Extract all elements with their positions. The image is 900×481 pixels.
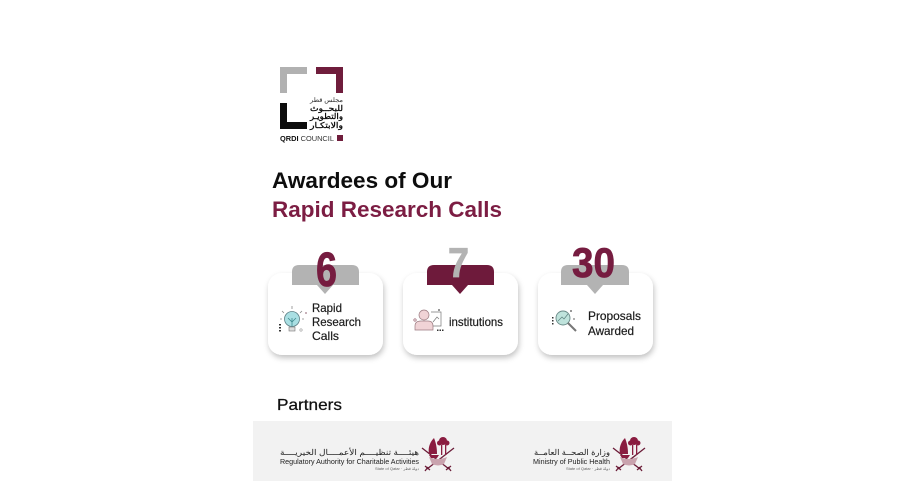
icon: Qatar emblem [422, 437, 454, 471]
tab [561, 265, 629, 294]
label: Rapid [312, 301, 342, 315]
English name: Ministry of Public Health [533, 457, 610, 466]
title: Awardees of Our [272, 168, 452, 193]
logo: Arabic name: للبحــوث [310, 104, 343, 114]
icon: magnifier with chart [552, 310, 576, 331]
English name: Regulatory Authority for Charitable Activities [280, 457, 419, 466]
label: Proposals [588, 309, 641, 323]
title [272, 168, 502, 222]
tab [292, 265, 359, 294]
panel: institutions [403, 239, 518, 355]
card [403, 273, 518, 355]
State of Qatar line: State of Qatar · دولة قطر [375, 466, 419, 471]
heading: partners: Partners [277, 397, 342, 414]
title: Rapid Research Calls [272, 197, 502, 222]
logo: square mark [337, 135, 343, 141]
panel: rapid research calls [268, 244, 383, 355]
icon: Qatar emblem [613, 437, 645, 471]
logo: maroon corner [316, 67, 343, 93]
label: Awarded [588, 324, 634, 338]
icon: light bulb [279, 306, 307, 332]
panel: proposals awarded [538, 239, 653, 355]
Arabic name: هيئــــة تنظيــــم الأعمــــال الخيريــــة [280, 447, 419, 457]
State of Qatar line: State of Qatar · دولة قطر [566, 466, 610, 471]
number: 7 [448, 239, 469, 286]
card [538, 273, 653, 355]
label: Calls [312, 329, 339, 343]
logo: Arabic name: والتطويـر [309, 112, 343, 122]
logo: Arabic name [309, 96, 344, 131]
partner: Regulatory Authority for Charitable Activities [280, 437, 454, 471]
logo: black corner [280, 103, 307, 129]
logo: QRDI Council [280, 67, 344, 143]
Arabic name: وزارة الصحــة العامــة [534, 448, 610, 457]
panel: partners band [253, 421, 672, 481]
logo: QRDI COUNCIL wordmark: QRDI COUNCIL [280, 134, 334, 143]
number: 6 [316, 244, 337, 297]
card [268, 273, 383, 355]
logo: Arabic name: والابتكـار [309, 121, 343, 131]
label [588, 309, 641, 338]
logo: Arabic name: مجلس قطر [309, 96, 344, 104]
tab [427, 265, 494, 294]
label: Research [312, 315, 361, 329]
label [312, 301, 361, 343]
icon: presenter with chart [414, 309, 444, 331]
number: 30 [572, 239, 615, 286]
logo: grey corner [280, 67, 307, 93]
label: institutions [449, 315, 503, 329]
partner: Ministry of Public Health [533, 437, 645, 471]
